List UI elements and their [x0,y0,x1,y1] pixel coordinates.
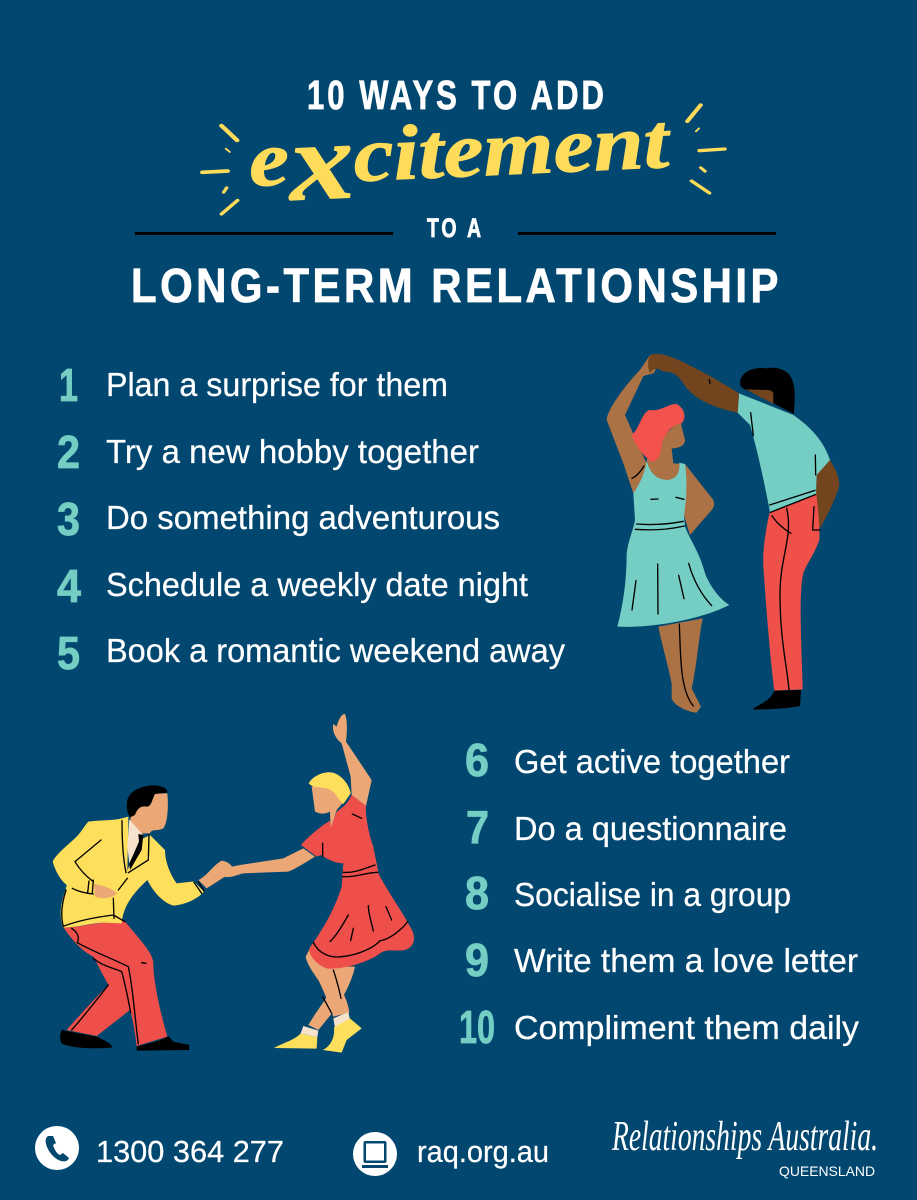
item 4 [57,560,528,612]
item 3: Do something adventurous [106,499,500,536]
item 3 [57,493,500,545]
logo: Relationships Australia Queensland [611,1114,878,1179]
logo: Relationships Australia Queensland: QUEENSLAND [779,1163,875,1179]
title [131,72,782,313]
list: ways 6 to 10 [459,734,860,1053]
icon: sparkle lines around excitement [202,105,725,214]
item 7: Do a questionnaire [514,810,787,847]
item 5: Book a romantic weekend away [106,632,565,669]
illustration: couple dancing, man twirling woman [607,354,839,713]
item 9: Write them a love letter [514,942,858,979]
icon: laptop [353,1132,397,1176]
item 7 [466,801,787,853]
item 5: 5 [57,627,80,679]
item 3: 3 [57,493,80,545]
heading: excitement: citement [351,97,673,198]
illustration: swing dancing couple [53,714,414,1053]
item 1: 1 [59,359,78,411]
contact: phone number: 1300 364 277 [96,1134,284,1169]
item 5 [57,627,565,679]
item 6 [465,734,790,786]
item 6: Get active together [514,743,790,780]
item 2: 2 [57,426,80,478]
heading: long-term relationship: LONG-TERM RELATIONSHIP [131,260,782,313]
item 1: Plan a surprise for them [106,366,448,403]
heading: excitement: e [247,115,285,203]
item 2: Try a new hobby together [106,433,479,470]
item 10: 10 [459,1001,495,1053]
item 9 [465,934,858,986]
item 8: Socialise in a group [514,876,791,913]
heading: excitement: x [284,98,356,225]
item 4: 4 [57,560,81,612]
item 10 [459,1001,860,1053]
item 6: 6 [465,734,489,786]
item 1 [59,359,448,411]
list: ways 1 to 5 [57,359,565,679]
item 10: Compliment them daily [514,1009,860,1046]
heading: to a: TO A [427,213,484,243]
item 7: 7 [466,801,489,853]
contact: website: raq.org.au [417,1134,549,1169]
footer contact and logo [35,1114,878,1179]
item 8 [465,867,791,919]
item 2 [57,426,479,478]
item 4: Schedule a weekly date night [106,566,528,603]
item 8: 8 [465,867,489,919]
heading: 10 ways to add: 10 WAYS TO ADD [307,72,607,118]
icon: phone [35,1126,79,1170]
item 9: 9 [465,934,489,986]
